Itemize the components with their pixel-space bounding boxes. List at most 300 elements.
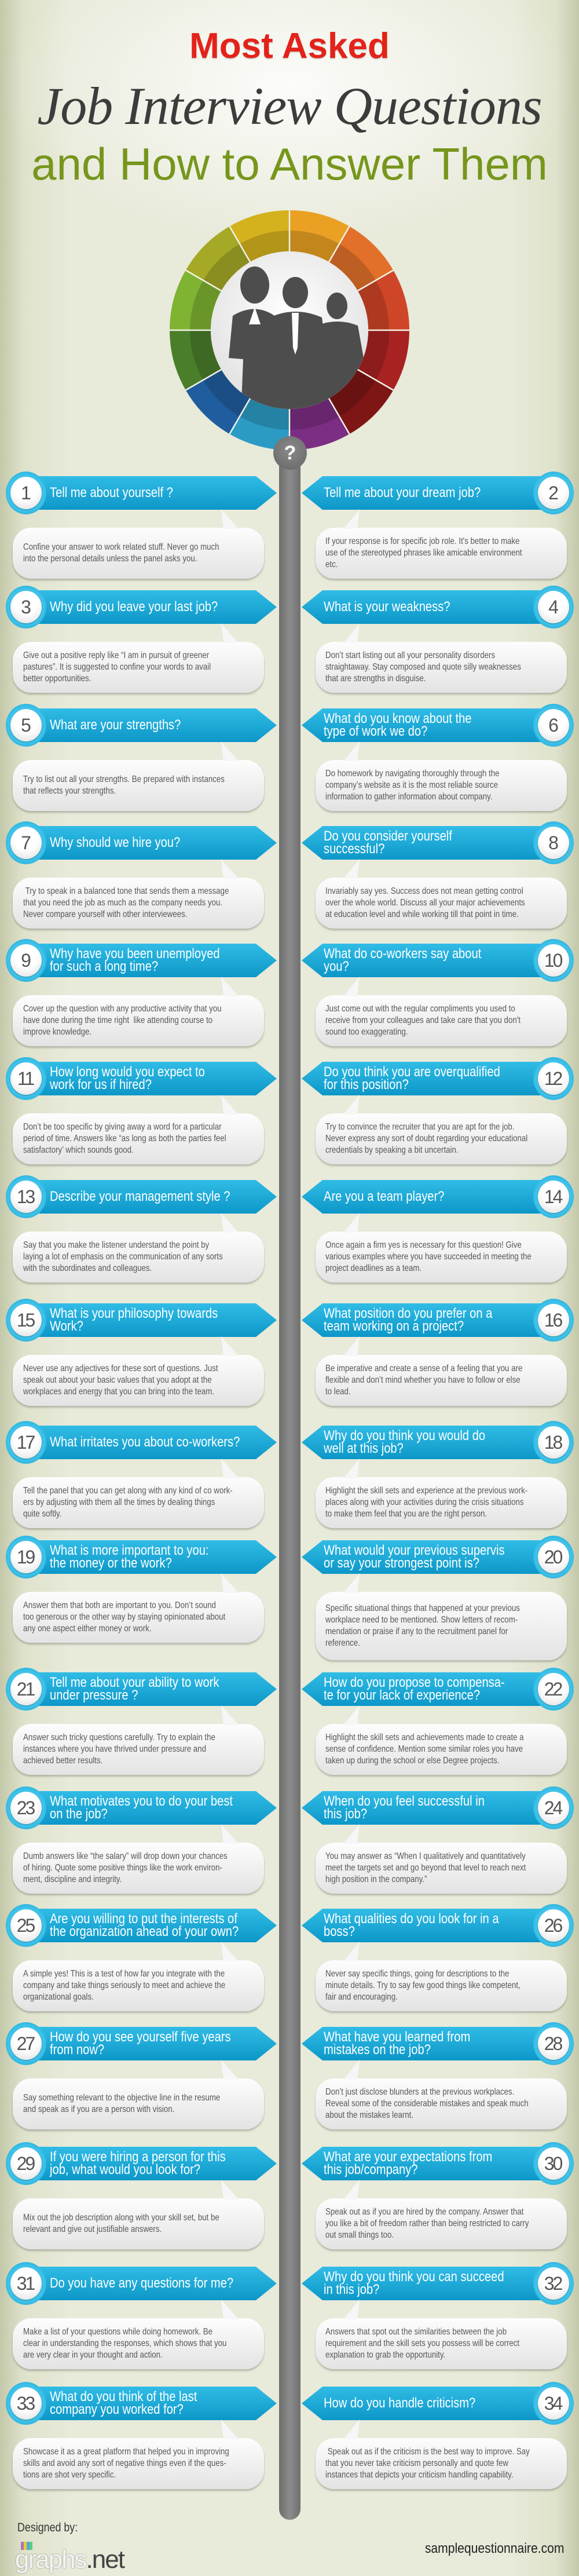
- question text 8: [324, 828, 452, 857]
- answer 9: have done during the time right like attending course to: [23, 1015, 212, 1025]
- number 17: [6, 1421, 46, 1464]
- number 20: 20: [544, 1547, 561, 1567]
- answer 12: [316, 1113, 567, 1164]
- number 8: 8: [548, 832, 557, 853]
- answer 26: minute details. Try to say few good things like competent,: [325, 1981, 521, 1990]
- number 16: [533, 1299, 574, 1342]
- question text 33: company you worked for?: [50, 2402, 184, 2417]
- question text 30: What are your expectations from: [324, 2149, 492, 2165]
- number 2: [533, 472, 574, 514]
- number 28: 28: [544, 2033, 561, 2054]
- answer 7: Try to speak in a balanced tone that sends them a message: [25, 886, 229, 896]
- number 25: 25: [17, 1915, 34, 1936]
- answer 9: Cover up the question with any productive activity that you: [23, 1004, 222, 1014]
- answer 1: [13, 528, 264, 579]
- question 1: [6, 472, 278, 514]
- answer 22: taken up during the school or else Degree projects.: [325, 1756, 499, 1766]
- question text 22: te for your lack of experience?: [324, 1687, 480, 1703]
- question text 28: What have you learned from: [324, 2029, 470, 2045]
- icon: question mark badge: [273, 436, 307, 470]
- question text 18: [324, 1428, 485, 1456]
- number 10: [533, 939, 574, 982]
- question text 30: [324, 2147, 538, 2180]
- answer 15: speak out about your basic values that you adopt at the: [23, 1375, 212, 1385]
- number 32: [533, 2262, 574, 2305]
- question 10: [302, 939, 574, 982]
- answer 9: [13, 995, 264, 1046]
- answer 29: relevant and give out justifiable answers.: [23, 2224, 162, 2234]
- number 33: 33: [17, 2393, 34, 2414]
- answer 8: Invariably say yes. Success does not mean getting control: [325, 886, 523, 896]
- answer 10: Just come out with the regular compliments you used to: [325, 1004, 515, 1014]
- answer 24: [316, 1843, 567, 1894]
- question text 28: mistakes on the job?: [324, 2042, 431, 2058]
- number 3: 3: [21, 597, 30, 617]
- question text 12: for this position?: [324, 1077, 409, 1092]
- answer 25: [13, 1960, 264, 2011]
- number 31: 31: [17, 2273, 34, 2294]
- number 30: [533, 2142, 574, 2185]
- answer 10: [316, 995, 567, 1046]
- question 19: [6, 1536, 278, 1579]
- answer 23: of hiring. Quote some positive things like the work environ-: [23, 1863, 222, 1873]
- question text 34: How do you handle criticism?: [324, 2395, 475, 2411]
- number 27: 27: [17, 2033, 34, 2054]
- footer: graphs.net logo: [15, 2542, 131, 2574]
- number 16: 16: [544, 1310, 561, 1331]
- answer 15: workplaces and energy that you can bring into the team.: [23, 1387, 214, 1397]
- question 7: [6, 821, 278, 864]
- answer 9: improve knowledge.: [23, 1027, 91, 1037]
- number 18: [533, 1421, 574, 1464]
- question text 29: If you were hiring a person for this: [50, 2149, 226, 2165]
- number 27: [6, 2022, 46, 2065]
- question 31: [6, 2262, 278, 2305]
- question text 28: [324, 2029, 470, 2058]
- answer 2: [316, 528, 567, 579]
- answer 12: Try to convince the recruiter that you are apt for the job.: [325, 1122, 515, 1132]
- answer 11: satisfactory’ which sounds good.: [23, 1145, 134, 1155]
- answer 29: [13, 2198, 264, 2249]
- answer 19: Answer them that both are important to you. Don’t sound: [23, 1601, 216, 1610]
- number 14: [533, 1175, 574, 1218]
- question text 32: [324, 2267, 538, 2300]
- answer 20: [316, 1592, 567, 1660]
- number 26: 26: [544, 1915, 561, 1936]
- answer 23: [13, 1843, 264, 1894]
- answer 31: clear in understanding the responses, which shows that you: [23, 2339, 226, 2348]
- question text 33: [50, 2387, 264, 2420]
- answer 13: [13, 1232, 264, 1282]
- answer 3: better opportunities.: [23, 674, 91, 684]
- question 18: [302, 1421, 574, 1464]
- question text 6: [324, 711, 472, 739]
- answer 22: Highlight the skill sets and achievements made to create a: [325, 1733, 524, 1742]
- question text 16: What position do you prefer on a: [324, 1306, 492, 1321]
- question 3: [6, 586, 278, 629]
- question 5: [6, 704, 278, 747]
- answer 16: [316, 1355, 567, 1406]
- question text 11: work for us if hired?: [50, 1077, 152, 1092]
- number 32: 32: [544, 2273, 561, 2294]
- number 21: [6, 1668, 46, 1711]
- answer 23: ment, discipline and integrity.: [23, 1875, 122, 1884]
- answer 32: Answers that spot out the similarities between the job: [325, 2327, 507, 2337]
- answer 7: that you need the job as much as the company needs you.: [23, 898, 222, 908]
- number 26: [533, 1904, 574, 1947]
- answer 28: Don’t just disclose blunders at the previous workplaces.: [325, 2087, 514, 2097]
- answer 1: Confine your answer to work related stuff. Never go much: [23, 542, 219, 552]
- question text 26: What qualities do you look for in a: [324, 1911, 499, 1927]
- answer 30: you like a bit of freedom rather than being restricted to carry: [325, 2219, 529, 2228]
- question 26: [302, 1904, 574, 1947]
- question text 9: [50, 946, 220, 974]
- number 8: [533, 821, 574, 864]
- answer 27: [13, 2078, 264, 2129]
- title: and How to Answer Them: and How to Answer Them: [31, 138, 548, 189]
- answer 16: flexible and don’t mind whether you have to follow or else: [325, 1375, 521, 1385]
- number 1: 1: [21, 483, 30, 503]
- footer: designed by: Designed by:: [17, 2521, 78, 2534]
- answer 10: receive from your colleagues and take care that you don't: [325, 1015, 521, 1025]
- question text 18: well at this job?: [324, 1441, 404, 1456]
- question text 29: job, what would you look for?: [50, 2162, 200, 2177]
- answer 22: [316, 1724, 567, 1775]
- question text 25: the organization ahead of your own?: [50, 1924, 239, 1939]
- question 9: [6, 939, 278, 982]
- answer 33: skills and avoid any sort of negative things even if the ques-: [23, 2458, 226, 2468]
- answer 4: [316, 642, 567, 693]
- number 25: [6, 1904, 46, 1947]
- question text 20: or say your strongest point is?: [324, 1555, 479, 1571]
- number 6: [533, 704, 574, 747]
- answer 33: [13, 2438, 264, 2489]
- answer 28: about the mistakes learnt.: [325, 2110, 413, 2120]
- number 2: 2: [548, 483, 557, 503]
- number 13: 13: [17, 1186, 34, 1207]
- answer 20: Specific situational things that happened at your previous: [325, 1603, 520, 1613]
- answer 14: project deadlines as a team.: [325, 1263, 422, 1273]
- question text 3: Why did you leave your last job?: [50, 599, 218, 615]
- question text 18: Why do you think you would do: [324, 1428, 485, 1444]
- answer 14: various examples where you have succeeded in meeting the: [325, 1252, 532, 1262]
- answer 18: places along with your activities during the crisis situations: [325, 1497, 523, 1507]
- question text 11: [50, 1064, 205, 1092]
- question 30: [302, 2142, 574, 2185]
- answer 11: [13, 1113, 264, 1164]
- central timeline bar: [279, 452, 301, 2520]
- answer 30: Speak out as if you are hired by the company. Answer that: [325, 2207, 523, 2217]
- question 12: [302, 1057, 574, 1100]
- question 20: [302, 1536, 574, 1579]
- title: Job Interview Questions: Job Interview Questions: [37, 76, 542, 136]
- answer 17: quite softly.: [23, 1509, 61, 1519]
- question text 8: successful?: [324, 841, 384, 857]
- answer 32: explanation to grab the opportunity.: [325, 2350, 445, 2360]
- answer 2: etc.: [325, 560, 338, 569]
- answer 18: to make them feel that you are the right person.: [325, 1509, 487, 1519]
- icon: question mark badge: ?: [284, 442, 296, 464]
- answer 13: with the subordinates and colleagues.: [23, 1263, 152, 1273]
- answer 11: Don’t be too specific by giving away a word for a particular: [23, 1122, 222, 1132]
- answer 18: [316, 1477, 567, 1528]
- answer 8: [316, 878, 567, 929]
- title: Most Asked: Most Asked: [189, 26, 390, 66]
- question text 24: [324, 1793, 485, 1822]
- answer 19: too generous or the other way by staying opinionated about: [23, 1612, 225, 1622]
- answer 14: [316, 1232, 567, 1282]
- footer: source site: samplequestionnaire.com: [424, 2541, 564, 2556]
- question text 19: the money or the work?: [50, 1555, 172, 1571]
- question text 19: What is more important to you:: [50, 1543, 209, 1558]
- question 34: [302, 2382, 574, 2425]
- answer 26: fair and encouraging.: [325, 1992, 398, 2002]
- question text 22: [324, 1675, 505, 1703]
- answer 6: Do homework by navigating thoroughly through the: [325, 769, 499, 779]
- question text 6: What do you know about the: [324, 711, 472, 726]
- answer 20: workplace need to be mentioned. Show letters of recom-: [325, 1615, 518, 1625]
- question text 16: team working on a project?: [324, 1318, 464, 1334]
- answer 22: sense of confidence. Mention some similar roles you have: [325, 1744, 523, 1754]
- question text 21: Tell me about your ability to work: [50, 1675, 219, 1690]
- answer 34: Speak out as if the criticism is the best way to improve. Say: [328, 2447, 530, 2457]
- question text 25: [50, 1911, 239, 1939]
- answer 5: [13, 760, 264, 811]
- number 4: [533, 586, 574, 629]
- question text 23: [50, 1793, 233, 1822]
- answer 31: Make a list of your questions while doing homework. Be: [23, 2327, 212, 2337]
- question 14: [302, 1175, 574, 1218]
- question text 22: How do you propose to compensa-: [324, 1675, 505, 1690]
- answer 2: use of the stereotyped phrases like amicable environment: [325, 548, 522, 558]
- question 24: [302, 1786, 574, 1829]
- answer 19: any one aspect either money or work.: [23, 1624, 151, 1634]
- question text 19: [50, 1543, 209, 1571]
- answer 12: Never express any sort of doubt regarding your educational: [325, 1134, 527, 1143]
- answer 7: Never compare yourself with other interviewees.: [23, 909, 187, 919]
- number 34: 34: [544, 2393, 561, 2414]
- answer 18: Highlight the skill sets and experience at the previous work-: [325, 1486, 527, 1496]
- hero wheel with silhouettes: [170, 210, 409, 450]
- question 6: [302, 704, 574, 747]
- answer 23: Dumb answers like “the salary” will drop down your chances: [23, 1851, 228, 1861]
- question 15: [6, 1299, 278, 1342]
- question text 9: for such a long time?: [50, 959, 158, 974]
- question text 24: this job?: [324, 1806, 367, 1822]
- answer 3: Give out a positive reply like “I am in pursuit of greener: [23, 651, 209, 660]
- question text 7: Why should we hire you?: [50, 835, 180, 850]
- question text 20: What would your previous supervis: [324, 1543, 505, 1558]
- answer 34: instances that depicts your criticism handling capability.: [325, 2470, 514, 2480]
- answer 33: Showcase it as a great platform that helped you in improving: [23, 2447, 229, 2457]
- number 19: 19: [17, 1547, 34, 1567]
- question 17: [6, 1421, 278, 1464]
- question text 15: Work?: [50, 1318, 83, 1334]
- answer 25: organizational goals.: [23, 1992, 94, 2002]
- question text 10: What do co-workers say about: [324, 946, 481, 962]
- number 15: [6, 1299, 46, 1342]
- answer 24: high position in the company.”: [325, 1875, 427, 1884]
- answer 26: Never say specific things, going for descriptions to the: [325, 1969, 509, 1979]
- question text 23: on the job?: [50, 1806, 108, 1822]
- logo text: graphs.net: [15, 2545, 124, 2574]
- question 32: [302, 2262, 574, 2305]
- answer 31: [13, 2318, 264, 2369]
- answer 3: [13, 642, 264, 693]
- number 10: 10: [544, 950, 561, 971]
- answer 12: credentials by speaking a bit uncertain.: [325, 1145, 459, 1155]
- question 23: [6, 1786, 278, 1829]
- answer 4: Don’t start listing out all your personality disorders: [325, 651, 495, 660]
- question text 4: What is your weakness?: [324, 599, 450, 615]
- number 18: 18: [544, 1432, 561, 1453]
- answer 33: tions are shot very specific.: [23, 2470, 116, 2480]
- answer 13: laying a lot of emphasis on the communication of any sorts: [23, 1252, 223, 1262]
- answer 11: period of time. Answers like “as long as both the parties feel: [23, 1134, 226, 1143]
- answer 21: Answer such tricky questions carefully. Try to explain the: [23, 1733, 215, 1742]
- number 9: 9: [21, 950, 30, 971]
- answer 4: straightaway. Stay composed and quote silly weaknesses: [325, 662, 521, 672]
- answer 30: out small things too.: [325, 2230, 394, 2240]
- answer 28: Reveal some of the considerable mistakes and speak much: [325, 2099, 529, 2109]
- answer 21: [13, 1724, 264, 1775]
- number 14: 14: [544, 1186, 561, 1207]
- question text 24: When do you feel successful in: [324, 1793, 485, 1809]
- answer 24: You may answer as “When I qualitatively and quantitatively: [325, 1851, 526, 1861]
- logo pixel icon: [21, 2542, 32, 2550]
- question text 15: What is your philosophy towards: [50, 1306, 218, 1321]
- answer 20: mendation or praise if any to the recruitment panel for: [325, 1627, 508, 1636]
- number 7: 7: [21, 832, 30, 853]
- number 29: 29: [17, 2153, 34, 2174]
- number 21: 21: [17, 1679, 34, 1700]
- answer 8: over the whole world. Discuss all your major achievements: [325, 898, 525, 908]
- question text 21: under pressure ?: [50, 1687, 138, 1703]
- number 3: [6, 586, 46, 629]
- number 12: 12: [544, 1068, 561, 1089]
- number 5: 5: [21, 715, 30, 736]
- question text 12: Do you think you are overqualified: [324, 1064, 500, 1080]
- question text 23: What motivates you to do your best: [50, 1793, 233, 1809]
- answer 8: at education level and while working till that point in time.: [325, 909, 519, 919]
- question text 15: [50, 1306, 218, 1334]
- answer 27: Say something relevant to the objective line in the resume: [23, 2093, 220, 2103]
- number 13: [6, 1175, 46, 1218]
- number 1: [6, 472, 46, 514]
- question 22: [302, 1668, 574, 1711]
- answer 17: Tell the panel that you can get along with any kind of co work-: [23, 1486, 233, 1496]
- question 28: [302, 2022, 574, 2065]
- answer 34: that you never take criticism personally and quote few: [325, 2458, 508, 2468]
- answer 32: [316, 2318, 567, 2369]
- number 12: [533, 1057, 574, 1100]
- answer 5: that reflects your strengths.: [23, 786, 116, 796]
- answer 2: If your response is for specific job role. It's better to make: [325, 536, 519, 546]
- question text 14: Are you a team player?: [324, 1189, 444, 1204]
- number 20: [533, 1536, 574, 1579]
- answer 10: sound too exaggerating.: [325, 1027, 408, 1037]
- answer 13: Say that you make the listener understand the point by: [23, 1240, 209, 1250]
- answer 6: information to gather information about company.: [325, 792, 492, 802]
- question 29: [6, 2142, 278, 2185]
- answer 15: Never use any adjectives for these sort of questions. Just: [23, 1364, 218, 1373]
- answer 32: requirement and the skill sets you possess will be correct: [325, 2339, 519, 2348]
- number 31: [6, 2262, 46, 2305]
- answer 3: pastures”. It is suggested to confine your words to avail: [23, 662, 211, 672]
- question text 21: [50, 1675, 219, 1703]
- question text 30: this job/company?: [324, 2162, 418, 2177]
- question 13: [6, 1175, 278, 1218]
- number 28: [533, 2022, 574, 2065]
- question text 26: [324, 1911, 499, 1939]
- number 24: 24: [544, 1797, 561, 1818]
- answer 6: company’s website as it is the most reliable source: [325, 780, 498, 790]
- answer 20: reference.: [325, 1638, 360, 1648]
- question text 6: type of work we do?: [324, 724, 427, 739]
- number 23: [6, 1786, 46, 1829]
- number 34: [533, 2382, 574, 2425]
- number 19: [6, 1536, 46, 1579]
- answer 6: [316, 760, 567, 811]
- answer 25: company and take things seriously to meet and achieve the: [23, 1981, 225, 1990]
- answer 1: into the personal details unless the panel asks you.: [23, 554, 197, 564]
- question text 33: What do you think of the last: [50, 2389, 197, 2405]
- answer 21: achieved better results.: [23, 1756, 102, 1766]
- answer 34: [316, 2438, 567, 2489]
- number 15: 15: [17, 1310, 34, 1331]
- answer 26: [316, 1960, 567, 2011]
- question text 32: in this job?: [324, 2282, 379, 2297]
- answer 27: and speak as if you are a person with vision.: [23, 2104, 174, 2114]
- number 4: 4: [548, 597, 557, 617]
- number 29: [6, 2142, 46, 2185]
- question text 12: [324, 1064, 500, 1092]
- answer 5: Try to list out all your strengths. Be prepared with instances: [23, 774, 225, 784]
- question text 17: What irritates you about co-workers?: [50, 1434, 240, 1450]
- question text 32: Why do you think you can succeed: [324, 2269, 504, 2285]
- number 17: 17: [17, 1432, 34, 1453]
- question text 16: [324, 1306, 492, 1334]
- number 24: [533, 1786, 574, 1829]
- number 11: [6, 1057, 46, 1100]
- number 5: [6, 704, 46, 747]
- answer 16: Be imperative and create a sense of a feeling that you are: [325, 1364, 522, 1373]
- number 30: 30: [544, 2153, 561, 2174]
- question text 2: Tell me about your dream job?: [324, 485, 481, 500]
- question text 13: Describe your management style ?: [50, 1189, 230, 1204]
- answer 17: [13, 1477, 264, 1528]
- question 16: [302, 1299, 574, 1342]
- question 33: [6, 2382, 278, 2425]
- question text 5: What are your strengths?: [50, 717, 181, 733]
- number 22: [533, 1668, 574, 1711]
- answer 31: are very clear in your thought and action.: [23, 2350, 163, 2360]
- question 11: [6, 1057, 278, 1100]
- question text 8: Do you consider yourself: [324, 828, 452, 844]
- question 8: [302, 821, 574, 864]
- question text 31: Do you have any questions for me?: [50, 2275, 233, 2291]
- answer 28: [316, 2078, 567, 2129]
- question text 20: [324, 1543, 505, 1571]
- answer 14: Once again a firm yes is necessary for this question! Give: [325, 1240, 522, 1250]
- question text 10: [324, 946, 482, 974]
- question text 26: boss?: [324, 1924, 355, 1939]
- question 27: [6, 2022, 278, 2065]
- answer 30: [316, 2198, 567, 2249]
- number 22: 22: [544, 1679, 561, 1700]
- question text 27: [50, 2029, 231, 2058]
- question 4: [302, 586, 574, 629]
